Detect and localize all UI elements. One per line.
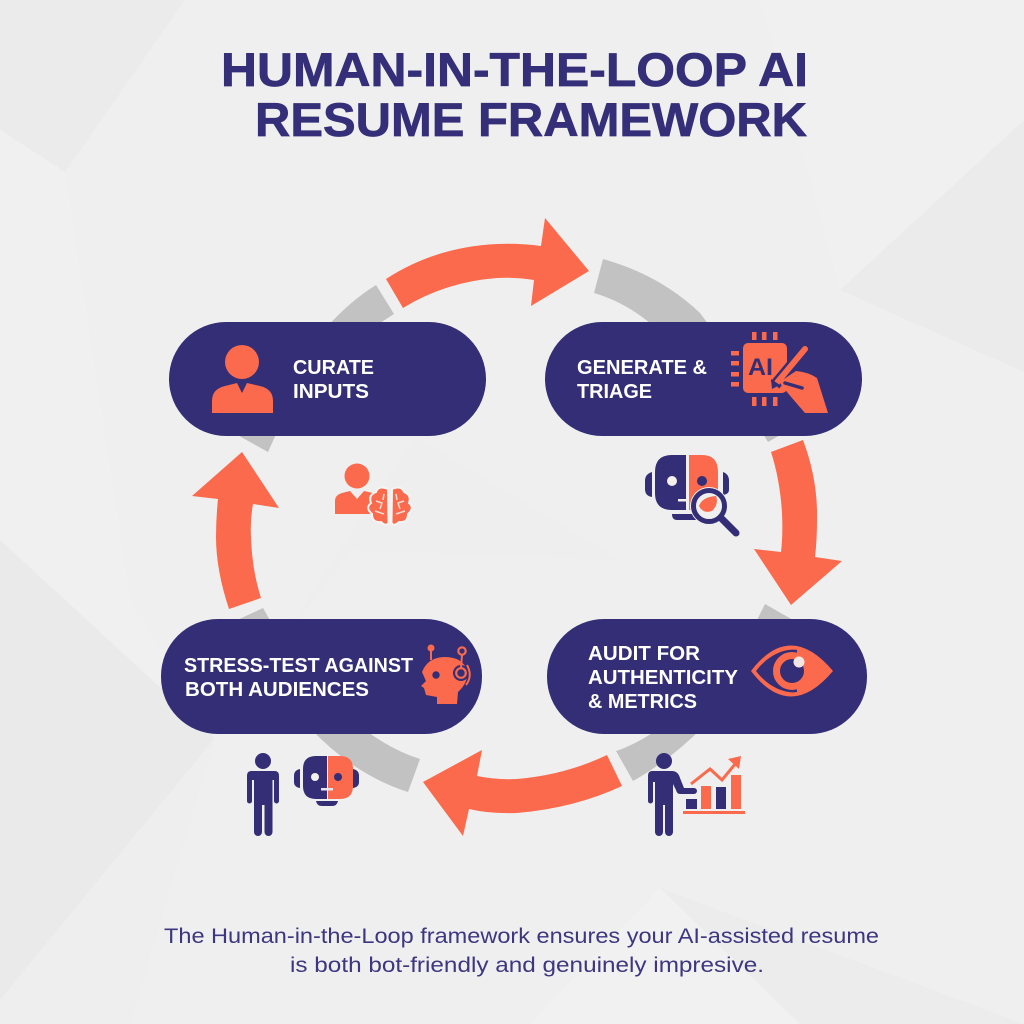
label: stress-test against both audiences — [184, 655, 413, 701]
icon: person and half robot — [247, 753, 359, 836]
panel: stress-test against both audiences — [161, 619, 482, 734]
gray loop ring segments — [232, 259, 800, 792]
label: curate inputs: CURATE — [293, 357, 374, 379]
icon: AI chip with pencil and hand: AI — [748, 354, 773, 381]
arrow: curate to generate — [386, 218, 589, 308]
arrow: generate to audit — [754, 440, 842, 605]
label: curate inputs — [293, 357, 374, 403]
label: generate and triage — [577, 357, 707, 403]
caption: is both bot-friendly and genuinely impresive. — [290, 954, 764, 977]
label: stress-test against both audiences: STRESS-TEST AGAINST — [184, 655, 413, 677]
label: generate and triage: GENERATE & — [577, 357, 707, 379]
label: curate inputs: INPUTS — [293, 381, 369, 403]
caption — [164, 925, 879, 977]
icon: person with brain — [335, 464, 412, 525]
panel: curate inputs — [169, 322, 486, 436]
icon: half robot with magnifier — [645, 455, 736, 533]
icon: AI chip with pencil and hand — [731, 332, 828, 413]
label: stress-test against both audiences: BOTH AUDIENCES — [185, 679, 369, 701]
label: audit for authenticity and metrics: AUTHENTICITY — [588, 667, 739, 689]
arrow: audit to stress-test — [423, 750, 622, 836]
title: HUMAN-IN-THE-LOOP AI — [221, 43, 808, 96]
title: RESUME FRAMEWORK — [255, 93, 807, 146]
label: audit for authenticity and metrics: & METRICS — [588, 691, 697, 713]
icon: person presenting bar chart — [648, 753, 745, 836]
icon: eye — [751, 646, 833, 696]
label: generate and triage: TRIAGE — [577, 381, 652, 403]
icon: robot head profile — [421, 644, 470, 704]
title — [221, 43, 808, 146]
label: audit for authenticity and metrics — [588, 643, 739, 713]
caption: The Human-in-the-Loop framework ensures your AI-assisted resume — [164, 925, 879, 948]
panel: generate and triage — [545, 322, 862, 436]
icon: person — [212, 345, 273, 413]
panel: audit for authenticity and metrics — [547, 619, 867, 734]
arrow: stress-test to curate — [192, 452, 279, 609]
label: audit for authenticity and metrics: AUDIT FOR — [588, 643, 701, 665]
